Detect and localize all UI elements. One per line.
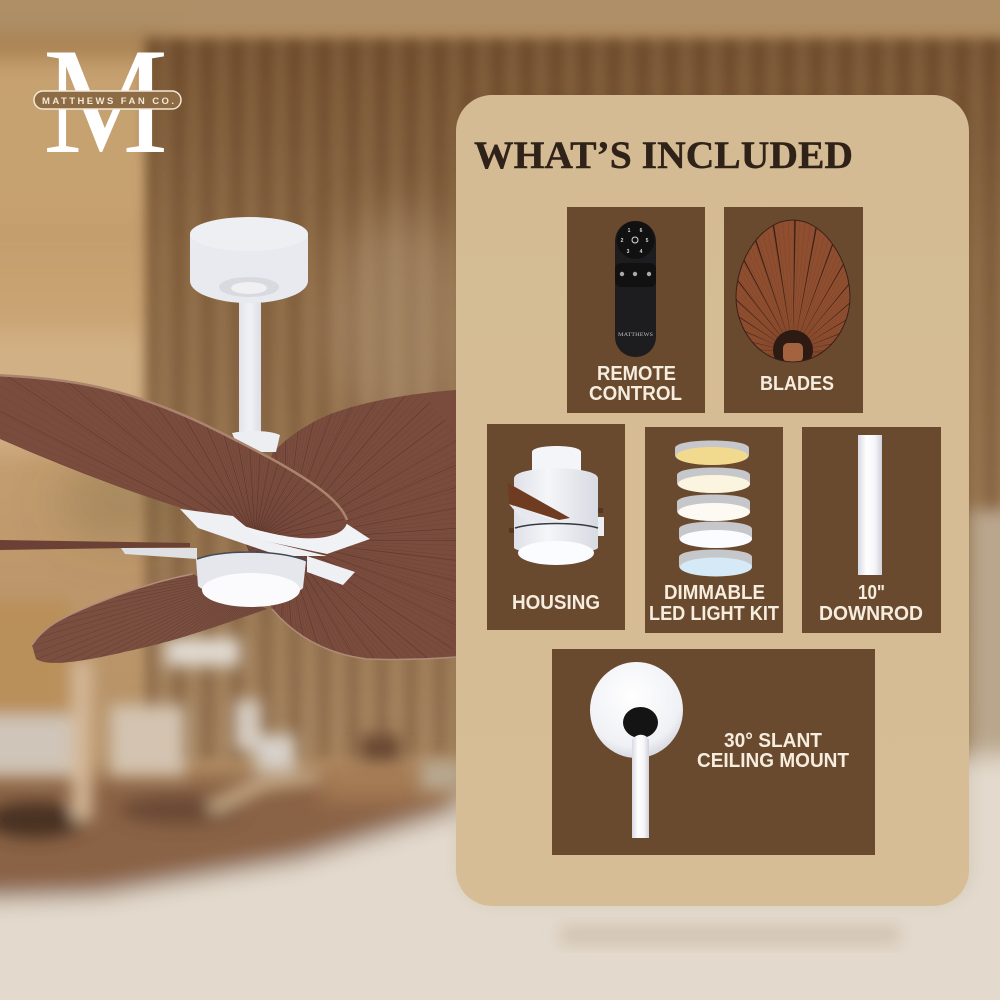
icon: slant mount — [590, 662, 683, 838]
floor — [0, 850, 1000, 1000]
icon: remote: 2 — [621, 238, 624, 244]
label: dimmable LED light kit — [649, 582, 779, 625]
label: downrod: 10" — [858, 582, 885, 604]
icon: remote: 3 — [627, 249, 630, 255]
ceiling fan product — [0, 217, 456, 695]
blade arm over top blade — [180, 509, 327, 556]
card: downrod — [802, 427, 941, 633]
label: slant ceiling mount — [697, 730, 849, 772]
LED light — [202, 573, 300, 607]
card: blades — [723, 207, 863, 422]
icon: LED discs — [675, 440, 752, 576]
label: dimmable LED light kit: DIMMABLE — [664, 582, 765, 604]
label: remote control: REMOTE — [597, 363, 676, 385]
card: slant ceiling mount — [552, 649, 875, 855]
label: dimmable LED light kit: LED LIGHT KIT — [649, 603, 779, 625]
title: WHAT’S INCLUDED — [474, 134, 853, 177]
logo: Matthews Fan Co. — [34, 17, 181, 185]
label: remote control: CONTROL — [589, 383, 682, 405]
card: dimmable LED light kit — [645, 427, 783, 633]
label: downrod: DOWNROD — [819, 603, 923, 625]
label: blades: BLADES — [760, 373, 834, 395]
disc soft white — [677, 468, 750, 493]
disc warm — [675, 440, 749, 465]
icon: palm blade — [736, 220, 850, 362]
label: slant ceiling mount: 30° SLANT — [724, 730, 822, 752]
disc neutral — [677, 494, 750, 521]
icon: remote: 1 — [628, 228, 631, 234]
icon: remote: MATTHEWS — [618, 332, 653, 338]
logo name pill: MATTHEWS FAN CO. — [42, 96, 174, 107]
motor housing — [196, 552, 307, 598]
motor coupling — [232, 431, 280, 452]
top left blade — [0, 374, 348, 538]
right blade — [185, 390, 456, 659]
lower left blade — [32, 573, 267, 663]
downrod — [239, 285, 261, 435]
icon: remote — [615, 221, 656, 357]
icon: remote: 6 — [640, 228, 643, 234]
panel: what's included — [456, 95, 969, 906]
panel shadow — [458, 99, 971, 904]
label: slant ceiling mount: CEILING MOUNT — [697, 750, 849, 772]
icon: remote: 4 — [640, 249, 643, 255]
disc white — [679, 522, 752, 548]
white blade arms — [121, 517, 370, 585]
card: housing — [487, 424, 625, 630]
icon: downrod — [858, 435, 882, 575]
logo name pill — [34, 91, 181, 109]
icon: housing — [508, 446, 604, 565]
label: downrod — [819, 582, 923, 625]
icon: remote: 5 — [646, 238, 649, 244]
disc cool — [679, 550, 752, 576]
ceiling canopy — [190, 217, 308, 303]
label: housing: HOUSING — [512, 592, 600, 614]
label: remote control — [589, 363, 682, 405]
far left blade edge — [0, 540, 190, 550]
card: remote control — [567, 207, 705, 413]
logo monogram M: M — [43, 17, 168, 185]
